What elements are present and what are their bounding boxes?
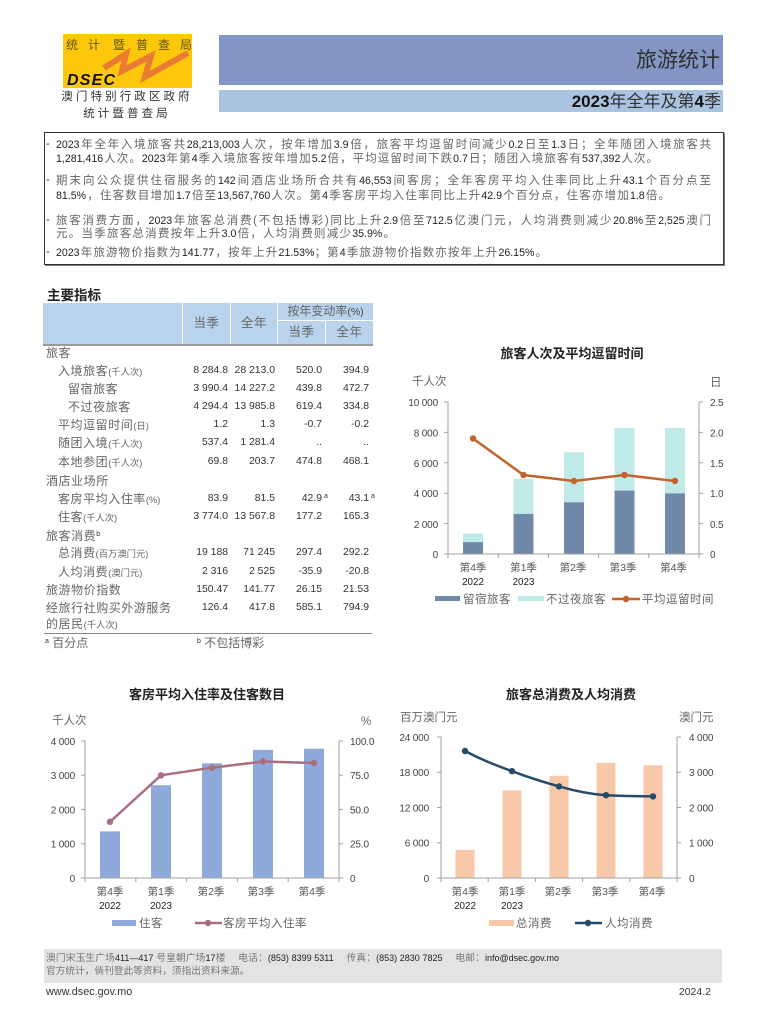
row: outbound residents: 585.1	[296, 602, 322, 613]
legend: 住客	[139, 916, 163, 930]
row: arrivals: 入境旅客(千人次)	[58, 364, 142, 378]
row: same-day: 4 294.4	[193, 401, 228, 412]
category labels: 第4季	[460, 561, 487, 574]
right axis labels: 1 000	[689, 838, 714, 850]
chart title: 客房平均入住率及住客数目	[129, 687, 285, 702]
right axis labels	[710, 398, 724, 561]
row: overnight: 472.7	[343, 383, 369, 394]
category labels: 第4季	[660, 561, 687, 574]
logo graphic: 暨	[113, 38, 125, 52]
category labels: 第1季	[499, 885, 526, 898]
category labels: 2022	[454, 901, 476, 912]
row: same-day: 334.8	[343, 401, 369, 412]
row: same-day	[68, 400, 369, 414]
row: per capita spending: 2 525	[249, 566, 275, 577]
chart: visitor arrivals and average stay	[408, 346, 724, 606]
row: visitors heading: 旅客	[46, 346, 71, 360]
logo graphic: 查	[158, 38, 170, 52]
left axis labels: 12 000	[399, 804, 430, 814]
category labels: 第4季	[299, 885, 326, 898]
left axis labels: 8 000	[414, 428, 439, 440]
row: per capita spending	[58, 565, 369, 579]
category labels: 第4季	[97, 885, 124, 898]
summary bullet 2: 81.5%，住客数目增加1.7倍至13,567,760人次。第4季客房平均入住率同比上升42.9个百分点，住客亦增加1.8倍。	[56, 190, 670, 202]
subtitle text: 2023年全年及第4季	[572, 92, 721, 111]
summary bullet 4: 2023年旅游物价指数为141.77，按年上升21.53%；第4季旅游物价指数亦按年上升26.15%。	[56, 247, 547, 259]
category labels: 2023	[513, 577, 535, 588]
table header	[43, 303, 373, 346]
row: guests: 165.3	[343, 511, 369, 522]
subtitle banner	[219, 90, 723, 112]
left axis labels: 0	[433, 550, 439, 561]
right axis labels: 25.0	[350, 840, 369, 850]
left axis labels	[399, 733, 430, 885]
row: guests: 3 774.0	[193, 511, 228, 522]
category labels: 2022	[462, 577, 484, 588]
row: average stay: -0.7	[304, 419, 322, 430]
right axis labels: 100.0	[350, 737, 375, 748]
chart title: 旅客人次及平均逗留时间	[500, 346, 644, 361]
row: guests	[58, 510, 369, 524]
summary box	[44, 132, 724, 265]
footer contact band	[44, 949, 722, 983]
summary bullet 3	[46, 214, 711, 240]
right axis labels	[350, 737, 375, 885]
row: spending heading: 旅客消费b	[46, 529, 100, 543]
row: occupancy: 42.9	[302, 493, 322, 504]
axes	[437, 737, 681, 882]
logo text: bureau name: 统计暨普查局	[83, 108, 171, 120]
row: total spending: 19 188	[196, 547, 228, 558]
summary bullet 2: 期末向公众提供住宿服务的142间酒店业场所合共有46,553间客房；全年客房平均入住率同比上升43.1个百分点至	[56, 175, 711, 187]
category labels: 第3季	[592, 885, 619, 898]
row: arrivals: 28 213.0	[235, 365, 275, 376]
row: per capita spending: -20.8	[345, 566, 369, 577]
category labels: 第1季	[148, 885, 175, 898]
row: same-day: 619.4	[296, 401, 322, 412]
bars: guests	[100, 749, 324, 878]
row: occupancy: 客房平均入住率(%)	[58, 492, 160, 506]
axes	[444, 402, 703, 558]
line: average stay	[470, 435, 678, 484]
left axis labels: 4 000	[414, 489, 439, 500]
row: price index: 21.53	[343, 584, 369, 595]
summary bullet 3: 旅客消费方面，2023年旅客总消费(不包括博彩)同比上升2.9倍至712.5亿澳门元，人均消费则减少20.8%至2,525澳门	[56, 215, 711, 227]
row: total spending: 292.2	[343, 547, 369, 558]
left axis labels: 0	[70, 874, 76, 885]
axis unit labels	[400, 710, 714, 724]
summary bullet 3: 元。当季旅客总消费按年上升3.0倍，人均消费则减少35.9%。	[56, 228, 395, 240]
summary bullet 2	[46, 174, 711, 202]
row: arrivals: 520.0	[296, 365, 322, 376]
left axis labels: 4 000	[51, 737, 76, 748]
left axis labels: 0	[424, 874, 430, 885]
table header: 全年	[336, 325, 362, 339]
row: overnight: 3 990.4	[193, 383, 228, 394]
row: arrivals	[58, 364, 369, 378]
summary bullet 1: 1,281,416人次。2023年第4季入境旅客按年增加5.2倍，平均逗留时间下跌0.7日；随团入境旅客有537,392人次。	[56, 153, 658, 165]
row: occupancy: 43.1	[349, 493, 369, 504]
row: average stay: -0.2	[351, 419, 369, 430]
left axis labels: 6 000	[414, 459, 439, 470]
table bottom rule	[44, 633, 372, 634]
title banner	[219, 35, 723, 85]
row: local tours	[58, 455, 369, 469]
axis unit labels: 百万澳门元	[400, 710, 458, 724]
row: overnight: 439.8	[296, 383, 322, 394]
logo text: bureau name	[61, 90, 193, 120]
legend	[489, 916, 653, 930]
row: outbound residents: 126.4	[202, 602, 228, 613]
row: outbound residents	[46, 601, 369, 631]
row: guests: 13 567.8	[235, 511, 275, 522]
legend: 不过夜旅客	[546, 592, 606, 606]
chart: occupancy and guests	[50, 687, 375, 930]
row: total spending	[58, 546, 369, 560]
contact address line: 澳门宋玉生广场411—417 号皇朝广场17楼 电话：(853) 8399 5311 传真：(853) 2830 7825 电邮：info@dsec.gov.mo	[46, 953, 559, 964]
row: average stay: 1.3	[261, 419, 275, 430]
row: average stay: 平均逗留时间(日)	[58, 418, 149, 432]
table header: 当季	[288, 325, 314, 339]
row: package tour arrivals: 537.4	[202, 437, 228, 448]
row: average stay	[58, 418, 369, 432]
row: guests: 177.2	[296, 511, 322, 522]
logo graphic: 局	[180, 38, 192, 52]
axis unit labels: 澳门元	[679, 710, 714, 724]
logo graphic	[63, 34, 192, 88]
left axis labels: 24 000	[399, 733, 430, 744]
legend: 人均消费	[605, 916, 653, 930]
axis unit labels	[52, 713, 371, 728]
footnote a: a 百分点	[45, 636, 88, 650]
summary bullet 1: 2023年全年入境旅客共28,213,003人次，按年增加3.9倍，旅客平均逗留时间减少0.2日至1.3日；全年随团入境旅客共	[56, 139, 711, 151]
line: occupancy rate	[107, 758, 317, 825]
right axis labels	[689, 733, 714, 885]
summary bullet 4: -	[46, 246, 50, 258]
row: per capita spending: -35.9	[298, 566, 322, 577]
row: package tour arrivals: 随团入境(千人次)	[58, 436, 142, 450]
right axis labels: 3 000	[689, 768, 714, 779]
left axis labels: 2 000	[51, 806, 76, 816]
category labels	[452, 885, 666, 912]
left axis labels	[51, 737, 76, 885]
left axis labels	[408, 398, 439, 561]
legend: 客房平均入住率	[223, 916, 307, 930]
chart title: 旅客总消费及人均消费	[506, 687, 636, 702]
row: average stay: 1.2	[214, 419, 228, 430]
summary bullet 1	[46, 138, 711, 165]
row: local tours: 69.8	[208, 456, 228, 467]
row: hotels heading: 酒店业场所	[46, 474, 109, 488]
table: key indicators	[43, 303, 375, 650]
category labels: 2023	[150, 901, 172, 912]
category labels: 2022	[99, 901, 121, 912]
left axis labels: 6 000	[405, 838, 430, 850]
row: price index: 旅游物价指数	[46, 583, 121, 597]
row: outbound residents: 经旅行社购买外游服务	[46, 601, 172, 615]
row: price index: 150.47	[196, 584, 228, 595]
row: price index: 26.15	[296, 584, 322, 595]
row: guests: 住客(千人次)	[58, 510, 117, 524]
category labels: 第4季	[452, 885, 479, 898]
right axis labels: 0	[689, 874, 695, 885]
row: package tour arrivals: ..	[363, 437, 369, 448]
axes	[81, 741, 343, 882]
right axis labels: 2.5	[710, 398, 724, 409]
bars: overnight and same-day	[463, 428, 685, 554]
right axis labels: 0.5	[710, 520, 724, 531]
legend: 总消费	[516, 916, 552, 930]
category labels	[97, 885, 326, 912]
row: per capita spending: 2 316	[202, 566, 228, 577]
category labels: 第3季	[610, 561, 637, 574]
row: occupancy: 81.5	[255, 493, 275, 504]
row: occupancy	[58, 492, 375, 506]
logo graphic: 普	[136, 38, 148, 52]
date: 2024.2	[679, 986, 711, 998]
row: package tour arrivals: ..	[316, 437, 322, 448]
category labels: 第1季	[510, 561, 537, 574]
category labels: 第2季	[560, 561, 587, 574]
logo graphic: 计	[88, 38, 100, 52]
row: local tours: 468.1	[343, 456, 369, 467]
row: price index: 141.77	[243, 584, 275, 595]
row: package tour arrivals: 1 281.4	[240, 437, 275, 448]
heading: key indicators: 主要指标	[47, 288, 101, 303]
row: local tours: 203.7	[249, 456, 275, 467]
logo text: bureau name: 澳门特别行政区政府	[61, 91, 193, 103]
category labels	[460, 561, 687, 588]
category labels: 第3季	[248, 885, 275, 898]
left axis labels: 18 000	[399, 768, 430, 779]
row: outbound residents: 794.9	[343, 602, 369, 613]
row: same-day: 13 985.8	[235, 401, 275, 412]
table header: 按年变动率(%)	[287, 304, 364, 318]
summary bullet 1: -	[46, 138, 50, 150]
right axis labels: 4 000	[689, 733, 714, 744]
axis unit labels: %	[361, 716, 371, 728]
legend: 平均逗留时间	[642, 593, 714, 606]
line: per capita spending	[462, 748, 656, 800]
axis unit labels: 千人次	[412, 374, 447, 388]
category labels: 第2季	[545, 885, 572, 898]
source note line: 官方统计，倘刊登此等资料，须指出资料来源。	[46, 966, 249, 977]
logo graphic: 统	[66, 38, 78, 52]
axis unit labels	[412, 374, 722, 389]
right axis labels: 50.0	[350, 806, 369, 816]
category labels: 第4季	[639, 885, 666, 898]
category labels: 2023	[501, 901, 523, 912]
table header: 全年	[241, 316, 267, 330]
right axis labels: 1.0	[710, 489, 724, 500]
axis unit labels: 千人次	[52, 713, 87, 727]
left axis labels: 3 000	[51, 771, 76, 782]
right axis labels: 1.5	[710, 459, 724, 470]
row: same-day: 不过夜旅客	[68, 400, 131, 414]
legend: 留宿旅客	[463, 592, 511, 606]
summary bullet 2: -	[46, 174, 50, 186]
left axis labels: 10 000	[408, 398, 439, 409]
row: overnight: 留宿旅客	[68, 382, 118, 396]
row: total spending: 297.4	[296, 547, 322, 558]
row: local tours: 474.8	[296, 456, 322, 467]
right axis labels: 0	[350, 874, 356, 885]
row: overnight	[68, 382, 369, 396]
row: arrivals: 394.9	[343, 365, 369, 376]
row: package tour arrivals	[58, 436, 369, 450]
footnote b: b 不包括博彩	[197, 636, 264, 650]
table header: 当季	[193, 316, 220, 330]
right axis labels: 2.0	[710, 428, 724, 440]
left axis labels: 2 000	[414, 520, 439, 531]
left axis labels: 1 000	[51, 840, 76, 850]
row: overnight: 14 227.2	[235, 383, 275, 394]
row: price index	[46, 583, 369, 597]
chart: total and per capita spending	[399, 687, 714, 930]
summary bullet 3: -	[46, 214, 50, 226]
right axis labels: 75.0	[350, 771, 369, 782]
title text: 旅游统计	[636, 49, 720, 72]
legend	[112, 916, 307, 930]
row: arrivals: 8 284.8	[193, 365, 228, 376]
row: outbound residents: 的居民(千人次)	[46, 617, 118, 631]
row: local tours: 本地参团(千人次)	[58, 455, 142, 469]
category labels: 第2季	[198, 885, 225, 898]
legend	[435, 592, 714, 606]
row: per capita spending: 人均消费(澳门元)	[58, 565, 142, 579]
right axis labels: 0	[710, 550, 716, 561]
right axis labels: 2 000	[689, 804, 714, 814]
bars: total spending	[456, 763, 662, 878]
row: total spending: 总消费(百万澳门元)	[58, 546, 148, 560]
row: occupancy: a	[324, 493, 328, 500]
row: occupancy: 83.9	[208, 493, 228, 504]
logo: DSEC	[61, 34, 193, 120]
website: www.dsec.gov.mo	[46, 986, 132, 998]
axis unit labels: 日	[710, 377, 722, 389]
row: occupancy: a	[371, 493, 375, 500]
row: total spending: 71 245	[243, 547, 275, 558]
row: outbound residents: 417.8	[249, 602, 275, 613]
